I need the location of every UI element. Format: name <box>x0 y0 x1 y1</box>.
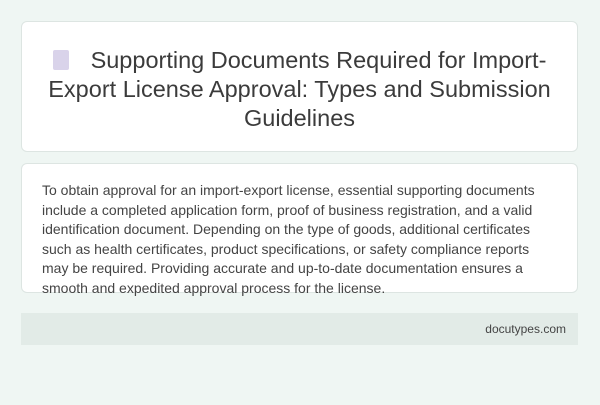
footer <box>21 313 578 345</box>
footer: docutypes.com <box>485 322 566 336</box>
title panel <box>21 21 578 152</box>
title heading: Supporting Documents Required for Import-Export License Approval: Types and Submission Guidelines <box>48 47 551 131</box>
description panel <box>21 163 578 293</box>
icon: document <box>53 50 69 70</box>
description text: To obtain approval for an import-export license, essential supporting documents include a completed application form, proof of business registration, and a valid identification document. Depending on the type of goods, additional certificates such as health certificates, product specifications, or safety compliance reports may be required. Providing accurate and up-to-date documentation ensures a smooth and expedited approval process for the license. <box>42 182 535 296</box>
